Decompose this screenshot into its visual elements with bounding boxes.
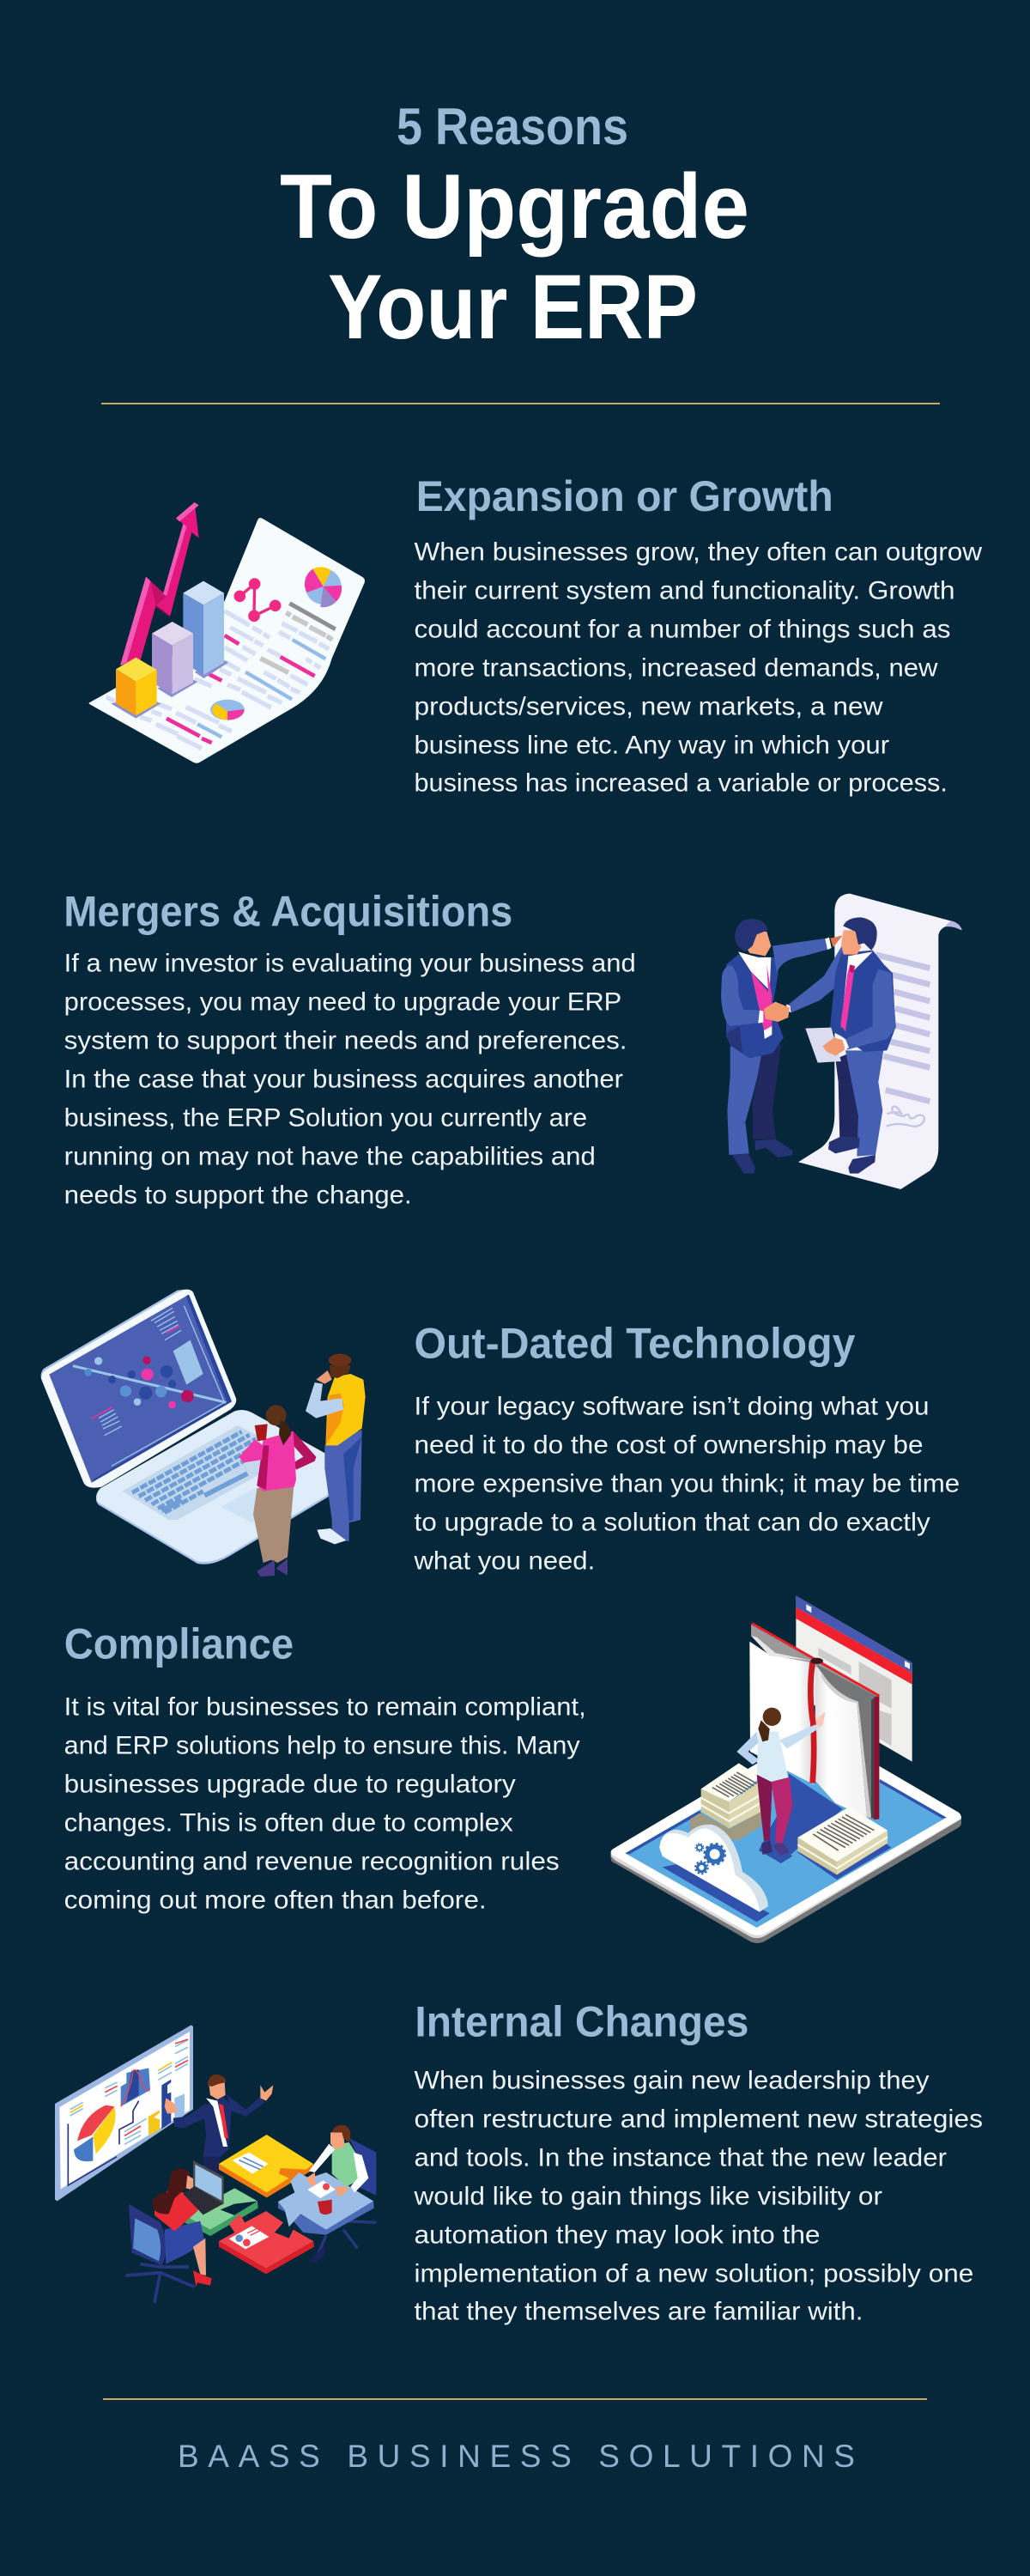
body text — [413, 1392, 960, 1575]
body text: It is vital for businesses to remain compliant, — [64, 1692, 586, 1721]
small pie chart — [210, 700, 245, 720]
heading: Expansion or Growth — [416, 472, 833, 520]
body text — [414, 538, 982, 798]
bar: yellow — [111, 658, 161, 719]
body text: coming out more often than before. — [64, 1886, 487, 1914]
body text: business has increased a variable or process. — [414, 769, 948, 798]
body text: more transactions, increased demands, new — [414, 653, 938, 682]
body text: products/services, new markets, a new — [414, 692, 883, 720]
contract scroll — [798, 894, 962, 1189]
body text — [64, 1692, 586, 1914]
body text: that they themselves are familiar with. — [414, 2298, 863, 2326]
woman with laptop on chair — [126, 2168, 212, 2303]
laptop base — [96, 1410, 329, 1564]
body text: their current system and functionality. Growth — [414, 576, 954, 605]
body text: system to support their needs and preferences. — [64, 1027, 627, 1055]
chair and man at right — [309, 2138, 376, 2263]
body text: implementation of a new solution; possibly one — [414, 2259, 973, 2287]
bar: purple — [152, 622, 197, 697]
body text: When businesses grow, they often can outgrow — [414, 538, 982, 567]
title line: To Upgrade: To Upgrade — [280, 155, 749, 258]
open book — [749, 1624, 879, 1820]
body text — [64, 950, 636, 1210]
illustration: growth report with bars and arrow — [89, 502, 365, 763]
body text: often restructure and implement new strategies — [414, 2105, 983, 2133]
laptop screen — [41, 1289, 236, 1488]
section: Internal Changes — [413, 1998, 983, 2326]
body text: need it to do the cost of ownership may be — [414, 1431, 924, 1459]
illustration: team meeting around puzzle table — [55, 2025, 376, 2303]
section: Compliance — [64, 1620, 586, 1914]
title — [280, 98, 749, 358]
laptop — [183, 2160, 224, 2215]
body text: to upgrade to a solution that can do exactly — [414, 1508, 930, 1536]
body text: what you need. — [413, 1546, 595, 1575]
body text: accounting and revenue recognition rules — [64, 1847, 560, 1875]
body text: and ERP solutions help to ensure this. Many — [64, 1731, 580, 1759]
body text: businesses upgrade due to regulatory — [64, 1770, 516, 1798]
body text: needs to support the change. — [64, 1182, 412, 1210]
puzzle piece: red — [219, 2211, 314, 2274]
body text: would like to gain things like visibility or — [413, 2182, 882, 2210]
body text: When businesses gain new leadership they — [414, 2067, 929, 2095]
cloud with gears — [659, 1825, 768, 1912]
body text: business, the ERP Solution you currently are — [64, 1104, 587, 1133]
network nodes — [234, 578, 281, 622]
body text — [413, 2067, 983, 2326]
section: Mergers & Acquisitions — [64, 887, 636, 1210]
browser window — [796, 1595, 912, 1762]
illustration: laptop with two people viewing chart — [41, 1289, 366, 1577]
body text: could account for a number of things such as — [414, 615, 951, 643]
large pie chart — [305, 567, 342, 607]
body text: automation they may look into the — [414, 2221, 821, 2249]
body text: running on may not have the capabilities and — [64, 1143, 596, 1171]
body text: If your legacy software isn’t doing what you — [414, 1392, 929, 1420]
man in yellow shirt — [306, 1354, 366, 1544]
section: Expansion or Growth — [414, 472, 982, 798]
body text: more expensive than you think; it may be time — [414, 1469, 960, 1498]
heading: Mergers & Acquisitions — [64, 887, 512, 935]
document stack right — [797, 1807, 888, 1874]
man left — [721, 919, 843, 1174]
section: Out-Dated Technology — [413, 1320, 960, 1575]
rising arrow — [120, 502, 199, 665]
footer brand: BAASS BUSINESS SOLUTIONS — [178, 2439, 855, 2474]
puzzle piece: yellow — [219, 2135, 313, 2197]
body text: changes. This is often due to complex — [64, 1808, 513, 1837]
man right — [788, 917, 896, 1174]
title line: Your ERP: Your ERP — [328, 255, 698, 358]
body text: and tools. In the instance that the new leader — [414, 2143, 947, 2172]
body text: processes, you may need to upgrade your ERP — [64, 988, 621, 1017]
puzzle piece: blue — [278, 2172, 374, 2235]
man seated — [306, 2125, 368, 2196]
handshake — [758, 1002, 791, 1024]
title line: 5 Reasons: 5 Reasons — [397, 98, 628, 155]
heading: Internal Changes — [415, 1998, 748, 2046]
heading: Compliance — [64, 1620, 294, 1668]
woman pointing — [736, 1708, 826, 1863]
woman in pink with cup — [239, 1405, 316, 1577]
presenter — [165, 2075, 273, 2181]
presentation board — [55, 2025, 193, 2201]
puzzle piece: green — [185, 2188, 258, 2236]
scatter points — [84, 1357, 194, 1408]
document stack left — [690, 1763, 761, 1840]
body text: In the case that your business acquires another — [64, 1066, 623, 1094]
tablet — [611, 1728, 961, 1943]
body text: If a new investor is evaluating your business and — [64, 950, 636, 978]
illustration: tablet with book, documents and cloud — [611, 1595, 961, 1943]
body text: business line etc. Any way in which your — [414, 731, 889, 759]
heading: Out-Dated Technology — [414, 1320, 856, 1368]
bar: blue — [183, 581, 228, 678]
illustration: two businessmen shaking hands with contract — [721, 894, 962, 1189]
